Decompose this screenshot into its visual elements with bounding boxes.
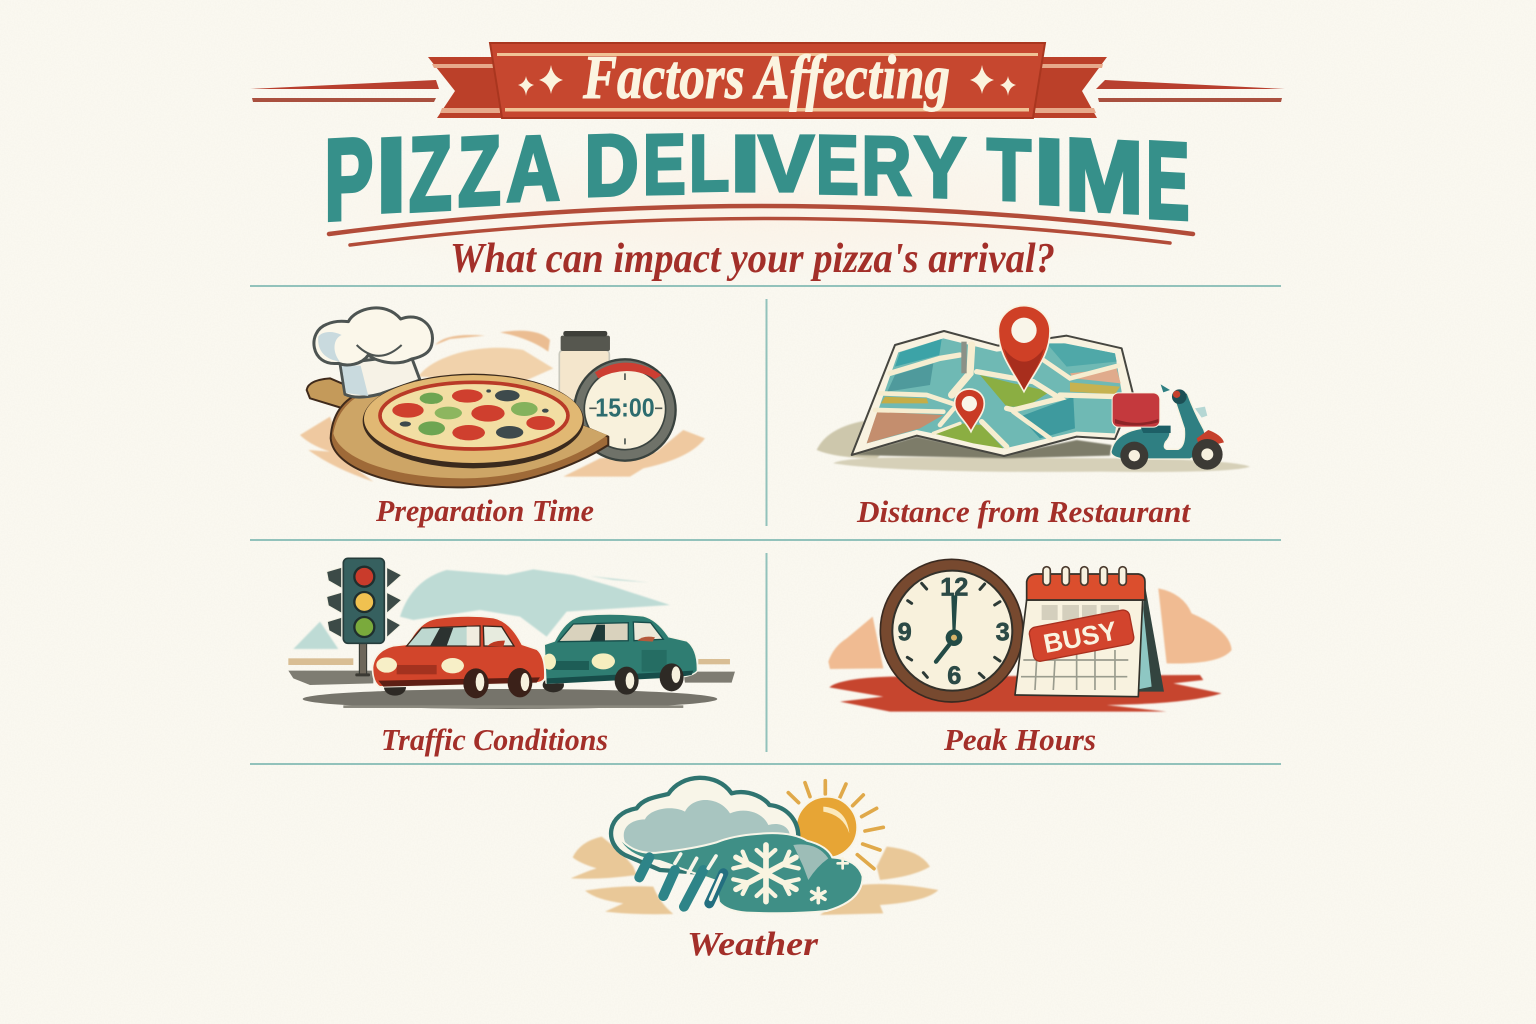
- label: traffic conditions: Traffic Conditions: [381, 722, 608, 757]
- paint brush background: [828, 588, 1232, 712]
- pizza peel: [307, 378, 608, 487]
- main title: V: [758, 119, 814, 209]
- panel: peak hours: [828, 559, 1232, 757]
- folded map: [852, 331, 1133, 456]
- header banner: [250, 43, 1285, 118]
- wall clock: 6: [947, 662, 961, 690]
- calendar rings: [1043, 567, 1126, 585]
- grey puff: [793, 844, 828, 880]
- banner side stripes: [250, 80, 1285, 102]
- pizza: [363, 374, 584, 468]
- icon: map, pins and scooter: [817, 306, 1250, 472]
- main title: L: [689, 118, 729, 208]
- traffic light: [327, 558, 402, 676]
- jar: [559, 331, 610, 400]
- map regions and roads: [867, 338, 1122, 448]
- front cloud: [622, 834, 862, 912]
- busy stamp: BUSY: [1041, 615, 1120, 659]
- snowflake: [733, 845, 799, 902]
- main title: [324, 113, 1189, 245]
- wall clock: [880, 559, 1023, 702]
- small snowflakes: [812, 858, 848, 903]
- large location pin: [998, 306, 1050, 392]
- sky brush: [293, 569, 670, 649]
- panel: preparation time: [300, 308, 705, 528]
- main title: I: [730, 119, 761, 208]
- subtitle: What can impact your pizza's arrival?: [450, 236, 1055, 282]
- wall clock: 9: [898, 619, 912, 647]
- wall clock: 3: [996, 619, 1010, 647]
- calendar grid: [1021, 605, 1128, 690]
- timer: 15:00: [595, 392, 655, 422]
- icon: traffic light and cars: [288, 558, 735, 709]
- ribbon centre: [490, 43, 1045, 118]
- main title: D: [584, 116, 639, 215]
- back cloud: [611, 778, 798, 877]
- main title: Y: [914, 119, 966, 217]
- timer: [574, 359, 676, 461]
- label: preparation time: Preparation Time: [375, 493, 594, 528]
- label: weather: Weather: [687, 926, 819, 963]
- wall clock: 12: [940, 573, 968, 601]
- teal car: [543, 615, 697, 695]
- busy stamp: [1028, 609, 1135, 662]
- desk calendar: [1015, 567, 1164, 697]
- main title: I: [1034, 119, 1065, 225]
- main title: T: [987, 121, 1031, 219]
- main title: E: [816, 118, 859, 212]
- paint brush background: [300, 331, 705, 482]
- label: peak hours: Peak Hours: [943, 722, 1096, 757]
- scooter: [1112, 384, 1224, 470]
- icon: clock and busy calendar: [828, 559, 1232, 712]
- main title: M: [1065, 117, 1143, 235]
- pizza toppings: [392, 389, 555, 440]
- panel: distance from restaurant: [817, 306, 1250, 529]
- road: [288, 658, 735, 709]
- sparkles: [518, 65, 1016, 96]
- title underline arcs: [329, 206, 1193, 245]
- rain drops: [639, 854, 723, 907]
- icon: pizza, chef hat and timer: [300, 308, 705, 487]
- ribbon tails: [428, 57, 1107, 118]
- panel: traffic conditions: [288, 558, 735, 757]
- section grid lines: [250, 286, 1281, 764]
- small location pin: [955, 389, 984, 432]
- chef hat: [314, 308, 432, 397]
- ground shadow: [817, 421, 1250, 472]
- banner title: Factors Affecting: [582, 44, 950, 112]
- main title: Z: [458, 116, 501, 228]
- red car: [373, 617, 544, 698]
- ribbon inner stripes: [497, 53, 1038, 112]
- paint brush background: [571, 837, 938, 915]
- main title: E: [643, 116, 686, 212]
- main title: Z: [409, 113, 452, 233]
- icon: weather cloud, rain, snow and sun: [571, 778, 938, 915]
- label: distance from restaurant: Distance from Restaurant: [856, 494, 1191, 529]
- panel: weather: [571, 778, 938, 963]
- sun: [796, 797, 857, 858]
- sun rays: [788, 781, 883, 869]
- main title: E: [1146, 120, 1189, 244]
- main title: R: [862, 120, 911, 213]
- main title: P: [324, 115, 373, 245]
- main title: I: [376, 116, 407, 234]
- main title: A: [506, 115, 560, 221]
